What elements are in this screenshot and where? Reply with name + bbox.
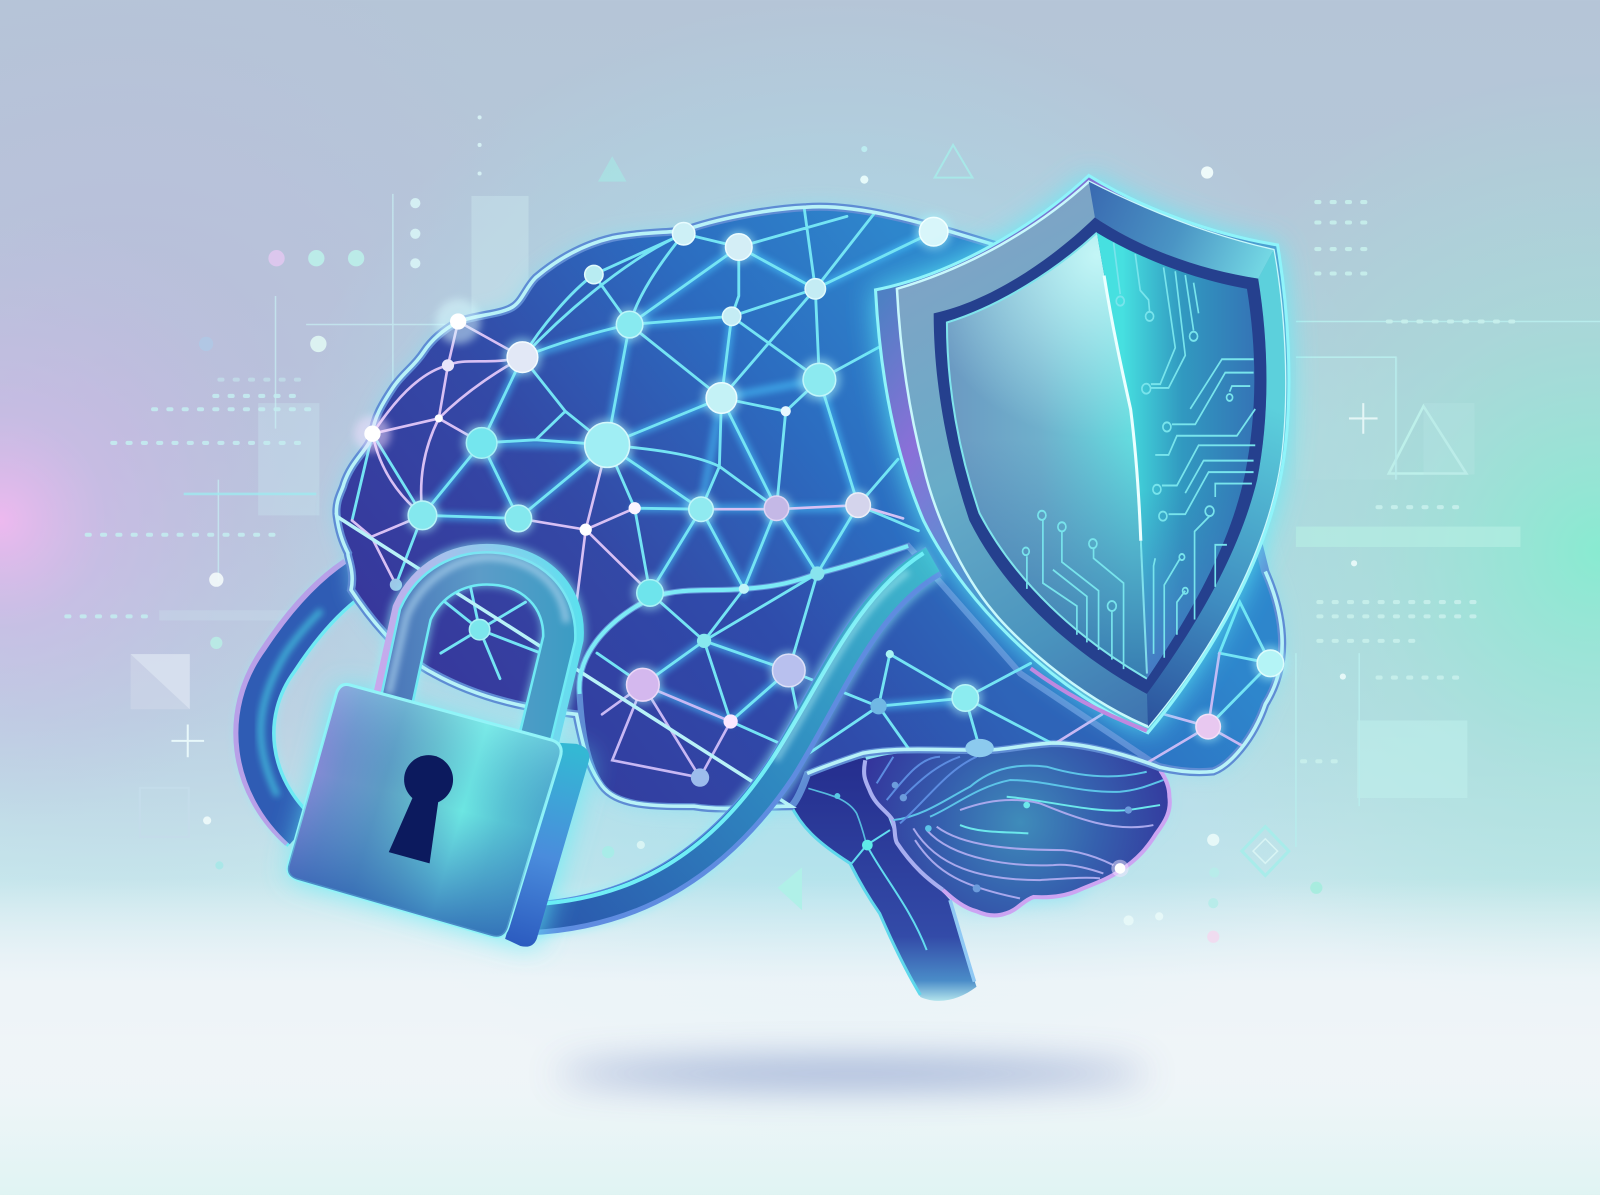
shield top right facet	[1089, 182, 1273, 279]
decorative tech shapes left	[66, 115, 802, 910]
shield right facet	[1147, 250, 1285, 727]
brain	[336, 207, 1288, 1001]
decorative tech shapes right	[860, 145, 1600, 943]
cerebellum	[864, 743, 1170, 915]
shield	[876, 176, 1289, 733]
temporal lobe outline	[579, 546, 908, 694]
shield outer rim	[876, 176, 1289, 733]
neural network edges	[352, 207, 1270, 778]
cyan edges	[352, 207, 934, 679]
shield dark border	[934, 217, 1266, 694]
brain main body	[336, 207, 1282, 808]
padlock side	[505, 743, 589, 947]
pink edges	[352, 321, 903, 602]
back loop of ribbon	[252, 575, 357, 832]
shield inner rim	[897, 182, 1285, 727]
padlock	[288, 557, 590, 947]
keyhole	[389, 755, 453, 863]
shield bottom purple edge	[1031, 668, 1147, 731]
shield centre highlight	[1104, 276, 1147, 674]
shield circuit traces	[1023, 243, 1255, 669]
padlock shackle	[389, 557, 566, 740]
padlock glow	[289, 685, 590, 947]
lobe edges	[597, 574, 1270, 755]
brainstem	[790, 757, 977, 1001]
network glow nodes	[354, 213, 1288, 742]
shield left panel	[947, 233, 1147, 679]
brain glow	[336, 207, 1282, 908]
front ribbon	[531, 553, 934, 918]
temporal lobe	[579, 546, 1160, 808]
shield right panel	[1097, 233, 1254, 679]
brain outline	[336, 207, 1282, 808]
padlock body	[288, 684, 561, 937]
edge glow	[422, 232, 965, 721]
network nodes	[364, 217, 1284, 787]
shield glow	[876, 176, 1289, 733]
floating shadow	[556, 1061, 1148, 1086]
